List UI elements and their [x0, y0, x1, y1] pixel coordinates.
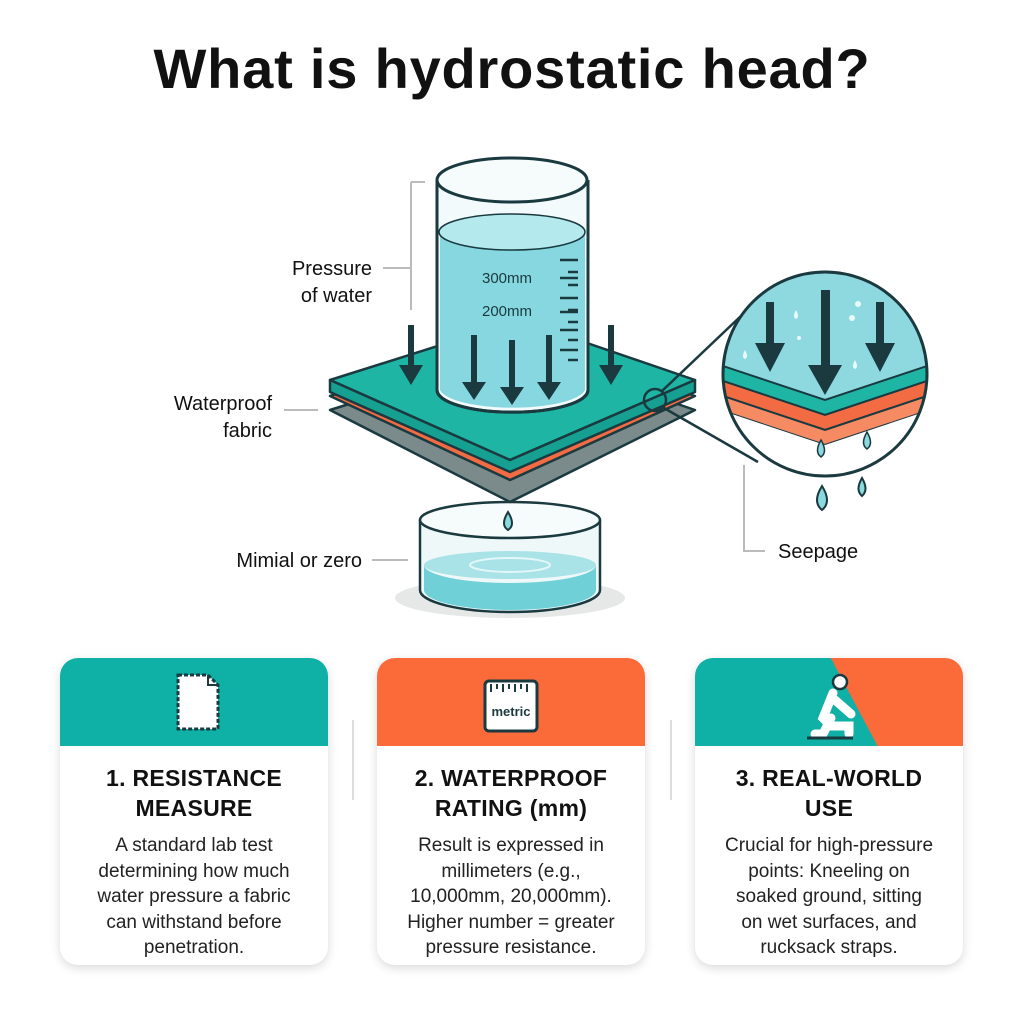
card 3 title: 3. REAL-WORLD: [736, 765, 922, 791]
card 3: [695, 658, 963, 965]
cylinder: 300mm: [482, 270, 532, 287]
card 2 body: 10,000mm, 20,000mm).: [410, 886, 612, 907]
card 3 body: [725, 835, 933, 958]
cylinder: 200mm: [482, 303, 532, 320]
card 3 title: [736, 765, 922, 821]
card 3 body: on wet surfaces, and: [741, 912, 917, 932]
cylinder: [437, 158, 588, 412]
card 1 body: [97, 835, 291, 958]
water drop under fabric: [504, 512, 512, 530]
card 3 body: soaked ground, sitting: [736, 886, 922, 907]
card 1: [60, 658, 328, 965]
card 1 title: MEASURE: [135, 795, 253, 821]
label: pressure of water: Pressure: [292, 258, 372, 280]
card 3 body: rucksack straps.: [760, 937, 898, 958]
card 2 title: RATING (mm): [435, 795, 587, 821]
card 2 header with ruler icon: metric: [491, 704, 531, 719]
card 3 body: points: Kneeling on: [748, 860, 910, 882]
card 1 body: determining how much: [98, 860, 290, 882]
petri dish: [395, 502, 625, 618]
label: waterproof fabric: fabric: [223, 420, 272, 442]
card 1 title: 1. RESISTANCE: [106, 765, 282, 791]
card 1 body: A standard lab test: [115, 835, 273, 856]
card 2 header with ruler icon: [377, 658, 645, 746]
card 1 title: [106, 765, 282, 821]
card 3 header with kneeling icon: [695, 658, 963, 746]
label: minimal or zero: Mimial or zero: [236, 550, 362, 572]
label: seepage: [744, 465, 858, 563]
card 3 body: Crucial for high-pressure: [725, 835, 933, 856]
label: pressure of water: [292, 182, 425, 310]
fabric layers: [330, 320, 695, 502]
card 3 title: USE: [805, 795, 853, 821]
label: waterproof fabric: Waterproof: [174, 393, 272, 415]
magnified view: [720, 270, 930, 510]
card 2 title: [415, 765, 607, 821]
title: What is hydrostatic head?: [154, 37, 870, 100]
pressure arrows: [399, 325, 623, 405]
card 2 body: millimeters (e.g.,: [441, 860, 581, 882]
card 2 body: Higher number = greater: [407, 912, 615, 932]
card 2: [377, 658, 645, 965]
card 1 body: penetration.: [144, 937, 244, 958]
card 2 body: [407, 835, 615, 958]
card 1 header with fabric icon: [60, 658, 328, 746]
diagram: [174, 156, 928, 618]
card 2 body: pressure resistance.: [425, 937, 597, 958]
label: waterproof fabric: [174, 393, 318, 442]
divider: [670, 720, 672, 800]
card 2 title: 2. WATERPROOF: [415, 765, 607, 791]
divider: [352, 720, 354, 800]
label: pressure of water: of water: [301, 285, 372, 307]
card 1 body: water pressure a fabric: [97, 886, 291, 907]
card 2 body: Result is expressed in: [418, 835, 604, 856]
magnifier connector: [644, 315, 758, 462]
card 1 body: can withstand before: [106, 912, 282, 932]
label: seepage: Seepage: [778, 541, 858, 563]
